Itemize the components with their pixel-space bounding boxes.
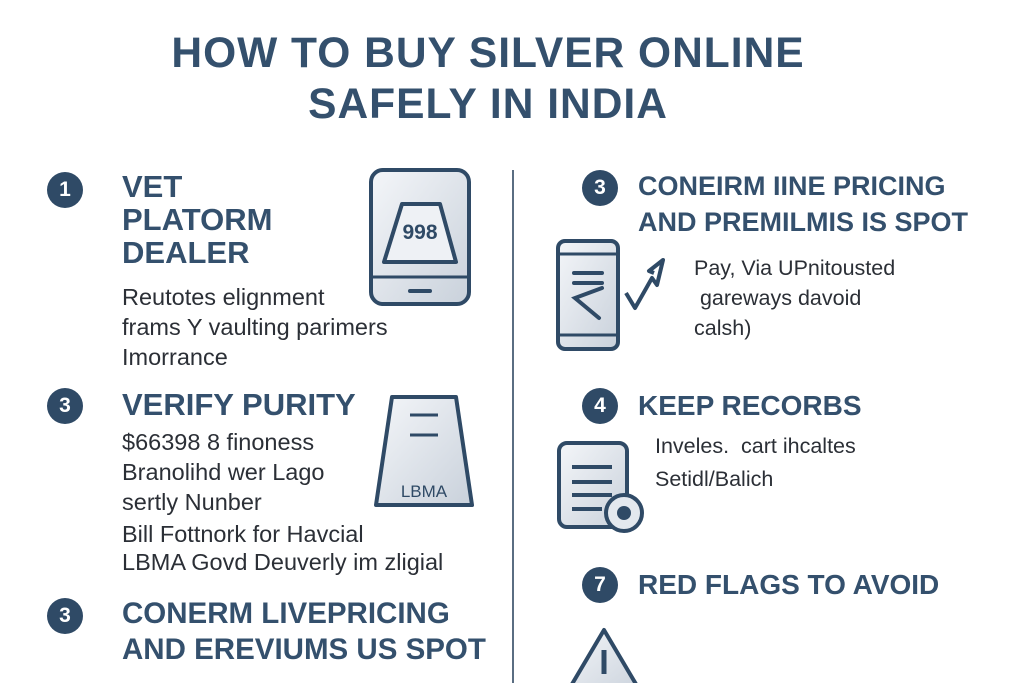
heading [638,171,968,237]
heading: RED FLAGS TO AVOID [638,569,939,600]
badge 3: 3 [59,394,71,417]
icon: LBMA bar: LBMA [401,482,448,501]
heading vet: PLATORM [122,202,272,237]
badge 3 [47,598,83,634]
body text payment [694,256,895,340]
title [171,30,805,128]
heading vet: VET [122,169,182,204]
step 3 right [582,170,968,237]
icon: warning [570,628,638,683]
heading: AND EREVIUMS US SPOT [122,633,486,666]
heading vet: DEALER [122,235,249,270]
body text [122,284,388,370]
heading: AND PREMILMIS IS SPOT [638,207,968,237]
divider [512,170,514,683]
icon: 998 device: 998 [402,221,438,244]
body text 2: Bill Fottnork for Havcial [122,521,364,547]
title: HOW TO BUY SILVER ONLINE [171,30,805,77]
body text 2: LBMA Govd Deuverly im zligial [122,549,443,575]
step 7 [582,567,939,603]
body text: Imorrance [122,344,228,370]
icon: document [557,441,644,533]
body text records [655,434,856,491]
body text 2 [122,521,443,575]
badge 1: 1 [59,178,71,201]
heading [122,597,486,666]
badge 3: 3 [594,176,606,199]
body text payment: calsh) [694,316,751,340]
body text payment: Pay, Via UPnitousted [694,256,895,280]
step 2 [47,387,443,575]
icon: 998 device [369,168,471,306]
title: SAFELY IN INDIA [308,81,668,128]
body text: frams Y vaulting parimers [122,314,388,340]
body text payment: gareways davoid [700,286,861,310]
step 3 left [47,597,486,666]
badge 3 [47,388,83,424]
badge 3: 3 [59,604,71,627]
body text: sertly Nunber [122,489,262,515]
body text: Branolihd wer Lago [122,459,324,485]
heading vet [122,169,272,270]
step 4 [582,388,862,424]
body text records: Setidl/Balich [655,467,773,491]
body text: Reutotes elignment [122,284,324,310]
icon: phone rupee [556,239,665,351]
badge 4 [582,388,618,424]
body text records: Inveles. cart ihcaltes [655,434,856,458]
heading: CONERM LIVEPRICING [122,597,450,630]
heading: KEEP RECORBS [638,390,862,421]
badge 4: 4 [594,394,606,417]
heading: CONEIRM IINE PRICING [638,171,946,201]
badge 7: 7 [594,573,606,596]
body text [122,429,324,515]
badge 3 [582,170,618,206]
badge 1 [47,172,83,208]
heading verify: VERIFY PURITY [122,387,356,422]
body text: $66398 8 finoness [122,429,314,455]
badge 7 [582,567,618,603]
icon: LBMA bar [374,395,474,507]
step 1 [47,169,388,370]
